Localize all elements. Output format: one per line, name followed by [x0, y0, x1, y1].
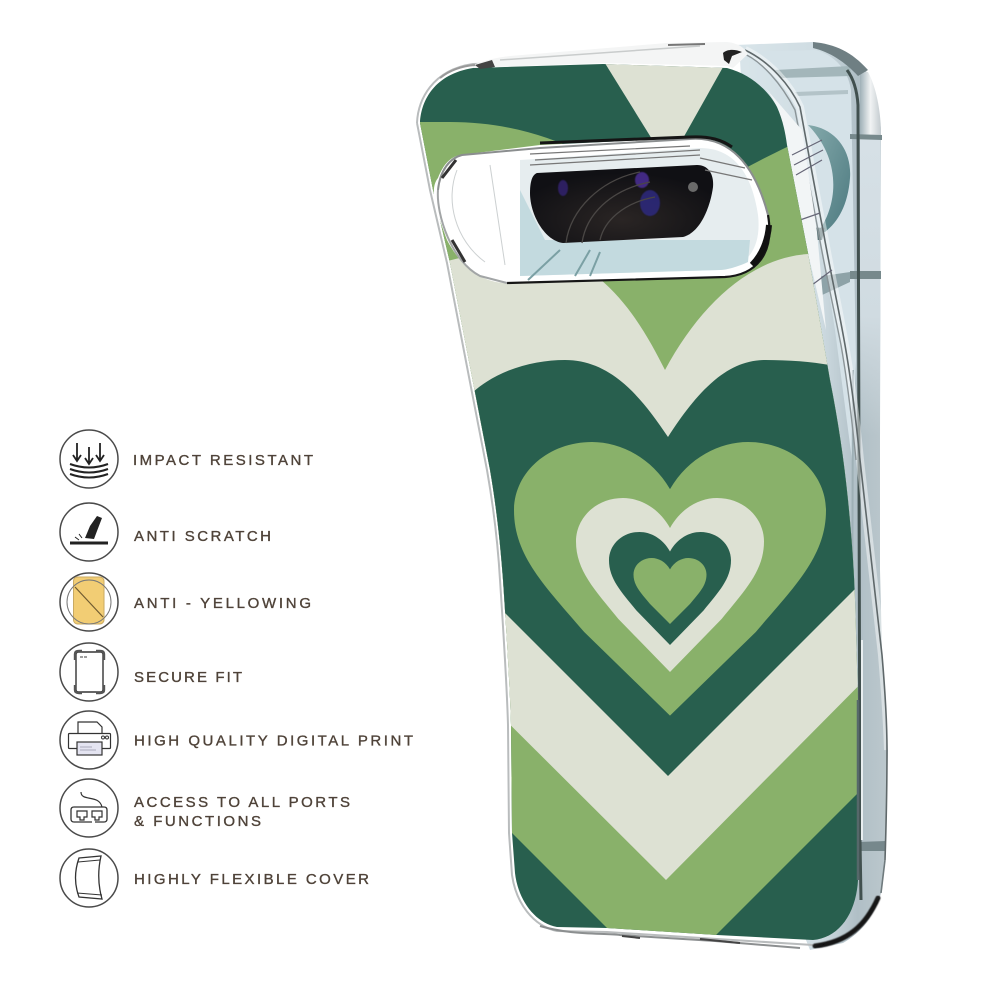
inner pale panel and rails [745, 42, 886, 900]
feature: anti scratch [60, 503, 271, 561]
label: ANTI SCRATCH [134, 528, 271, 545]
camera bump crescent [808, 125, 850, 232]
feature: high quality digital print [60, 711, 413, 769]
camera rim reflections [438, 137, 769, 283]
camera cut-out of case [434, 137, 769, 283]
phone body seen behind the case [735, 42, 888, 950]
label: IMPACT RESISTANT [133, 452, 313, 469]
icon: bent cover [60, 849, 118, 907]
label: ANTI - YELLOWING [134, 595, 311, 612]
label: HIGH QUALITY DIGITAL PRINT [134, 732, 413, 750]
flexed case edge [745, 50, 888, 750]
feature list [60, 430, 413, 907]
feature: impact resistant [60, 430, 313, 488]
top glass rim of case [440, 42, 748, 78]
case outline [417, 60, 813, 945]
label: SECURE FIT [134, 669, 242, 686]
feature: access to all ports and functions [60, 779, 350, 837]
icon: ports [60, 779, 118, 837]
bottom case rim [540, 700, 885, 948]
icon: phone with corner bumpers [60, 643, 118, 701]
phone with clear case [400, 40, 900, 986]
icon: impact arrows [60, 430, 118, 488]
label: HIGHLY FLEXIBLE COVER [134, 871, 369, 888]
icon: blade scratching surface [60, 503, 118, 561]
label [134, 794, 350, 830]
icon: printer [60, 711, 118, 769]
label: & FUNCTIONS [134, 813, 261, 830]
glass panel between print and flexed edge [762, 84, 826, 330]
camera lens [530, 165, 713, 243]
upper right body highlight [860, 72, 881, 136]
label: ACCESS TO ALL PORTS [134, 794, 350, 811]
icon: yellow phone crossed out [60, 573, 118, 631]
feature: highly flexible cover [60, 849, 369, 907]
printed heart pattern [420, 64, 858, 940]
side body light fade [860, 136, 880, 436]
feature: anti yellowing [60, 573, 311, 631]
feature: secure fit [60, 643, 242, 701]
